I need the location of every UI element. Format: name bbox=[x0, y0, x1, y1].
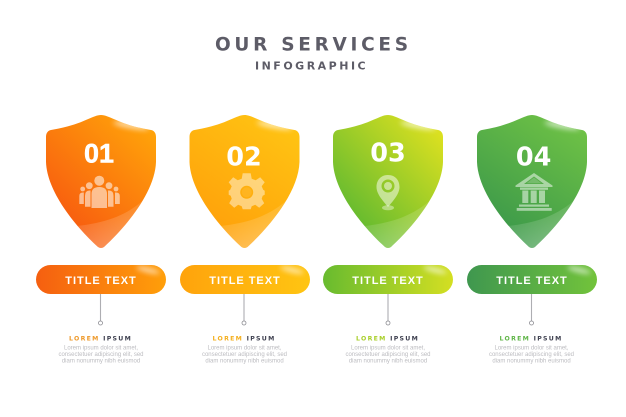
shield 02 bbox=[184, 115, 304, 255]
shield 01 bbox=[41, 115, 161, 255]
text block 02: diam nonummy nibh euismod bbox=[205, 358, 284, 364]
text block 04: diam nonummy nibh euismod bbox=[492, 358, 571, 364]
text block 01: Lorem ipsum dolor sit amet, bbox=[64, 346, 138, 352]
text block 01: LOREM IPSUM bbox=[69, 335, 132, 342]
icon: location pin bbox=[376, 175, 400, 210]
pill label 03: TITLE TEXT bbox=[352, 275, 424, 287]
text block 04: LOREM IPSUM bbox=[500, 335, 563, 342]
text block 02: Lorem ipsum dolor sit amet, bbox=[207, 346, 282, 352]
text block 03: Lorem ipsum dolor sit amet, bbox=[351, 346, 425, 352]
text block 01: diam nonummy nibh euismod bbox=[62, 358, 140, 364]
text block 04: Lorem ipsum dolor sit amet, bbox=[494, 346, 569, 352]
number 01: 01 bbox=[84, 138, 114, 168]
title pill 01 bbox=[36, 265, 166, 294]
text block 02 bbox=[202, 335, 287, 364]
pill label 02: TITLE TEXT bbox=[209, 275, 281, 287]
panel: service 02 bbox=[180, 115, 310, 364]
text block 03 bbox=[345, 335, 431, 364]
text block 03: LOREM IPSUM bbox=[356, 335, 419, 342]
number 04: 04 bbox=[516, 142, 551, 172]
connector 02 bbox=[242, 294, 246, 325]
connector 04 bbox=[530, 294, 534, 325]
connector 03 bbox=[386, 294, 390, 325]
title: OUR SERVICES bbox=[215, 34, 412, 56]
text block 02: consectetuer adipiscing elit, sed bbox=[202, 352, 287, 358]
shield 04 bbox=[472, 115, 592, 255]
number 02: 02 bbox=[226, 142, 262, 172]
pill label 01: TITLE TEXT bbox=[65, 275, 137, 287]
icon: bank bbox=[516, 173, 552, 211]
title pill 02 bbox=[180, 265, 310, 294]
text block 01: consectetuer adipiscing elit, sed bbox=[58, 352, 144, 358]
text block 01 bbox=[58, 335, 144, 364]
connector 01 bbox=[98, 294, 102, 325]
panel: service 03 bbox=[323, 115, 453, 364]
pill label 04: TITLE TEXT bbox=[496, 275, 568, 287]
subtitle: INFOGRAPHIC bbox=[255, 59, 368, 72]
icon: people bbox=[79, 176, 120, 208]
shield 03 bbox=[328, 115, 448, 255]
text block 02: LOREM IPSUM bbox=[212, 335, 276, 342]
text block 04 bbox=[489, 335, 574, 364]
title pill 03 bbox=[323, 265, 453, 294]
number 03: 03 bbox=[370, 138, 406, 168]
text block 03: diam nonummy nibh euismod bbox=[349, 358, 427, 364]
panel: service 04 bbox=[467, 115, 597, 364]
icon: gear bbox=[229, 173, 265, 209]
text block 03: consectetuer adipiscing elit, sed bbox=[345, 352, 431, 358]
title pill 04 bbox=[467, 265, 597, 294]
panel: service 01 bbox=[36, 115, 166, 364]
text block 04: consectetuer adipiscing elit, sed bbox=[489, 352, 574, 358]
